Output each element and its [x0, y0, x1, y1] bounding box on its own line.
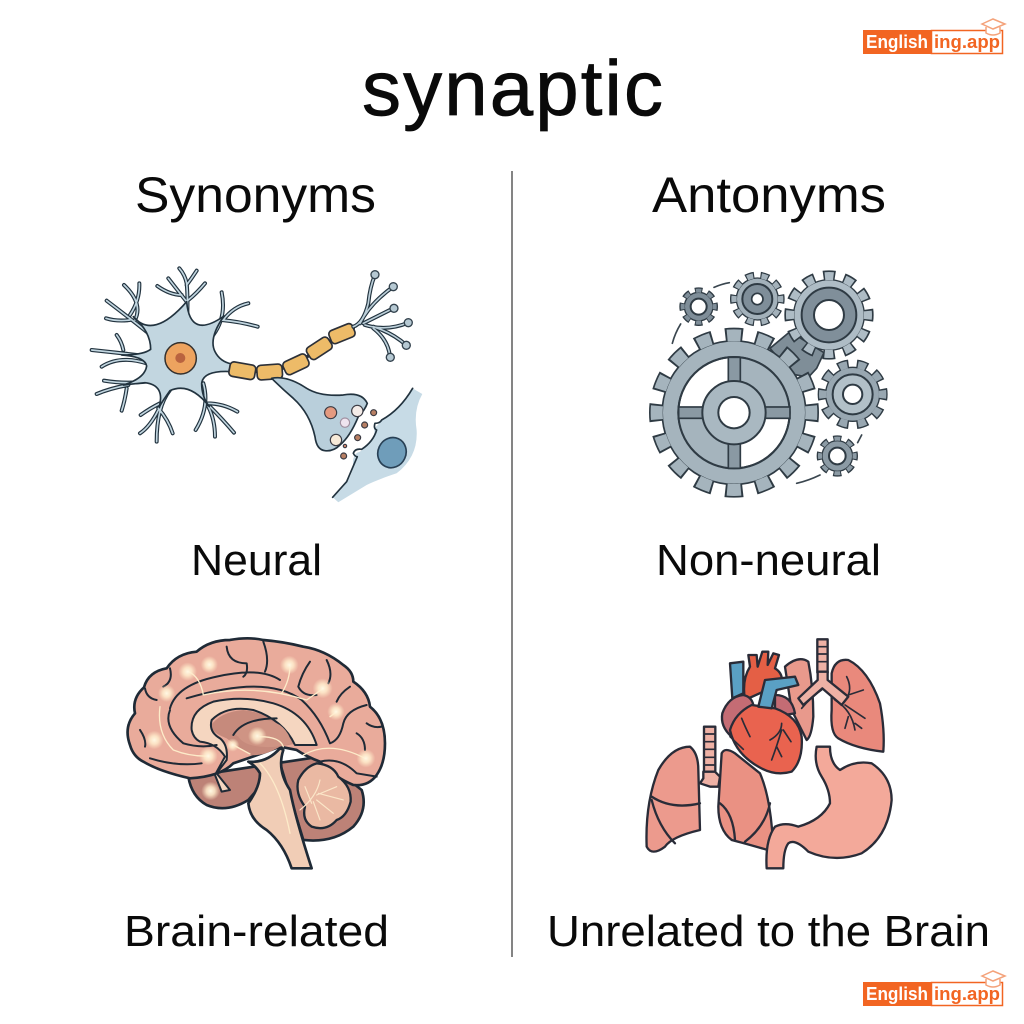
- logo top: [863, 19, 1005, 54]
- logo top: ing.app: [934, 32, 1000, 52]
- gear small top left: [683, 291, 715, 323]
- vesicles: [325, 405, 377, 459]
- myelin sheaths: [228, 322, 356, 380]
- logo top: English: [866, 32, 928, 52]
- cell body: [122, 302, 232, 407]
- label: Neural: Neural: [191, 536, 322, 585]
- inner darker core: [210, 710, 297, 755]
- gear small bottom: [820, 439, 855, 473]
- heading: antonyms: Antonyms: [652, 167, 886, 223]
- icon: organs: [646, 639, 892, 868]
- nucleus: [165, 343, 196, 374]
- synaptic bouton: [272, 378, 367, 451]
- glowing neural nodes: [145, 656, 375, 800]
- thalamus: [233, 720, 292, 747]
- logo bottom: [863, 971, 1005, 1006]
- receiving nucleus: [373, 433, 411, 472]
- label: Unrelated to the Brain: Unrelated to the Brain: [547, 907, 990, 956]
- receiving neuron: [333, 388, 422, 502]
- icon: brain: [128, 638, 385, 868]
- axon branches: [353, 275, 408, 357]
- heading: synonyms: Synonyms: [135, 167, 376, 223]
- title: synaptic: [362, 44, 663, 132]
- dashed orbit arcs: [672, 283, 862, 483]
- logo bottom: English: [866, 984, 928, 1004]
- gear connector: [770, 332, 824, 377]
- cerebellum: [297, 763, 351, 828]
- stomach: [766, 747, 892, 868]
- brain stem: [248, 748, 312, 868]
- upper lungs: [785, 639, 884, 752]
- brain lower region and cerebellum backing: [188, 757, 364, 841]
- label: Brain-related: Brain-related: [124, 907, 389, 956]
- cerebrum: [128, 638, 385, 785]
- gear top right: [790, 276, 868, 354]
- gear right: [823, 364, 883, 424]
- logo bottom: ing.app: [934, 984, 1000, 1004]
- dendrites fill: [92, 268, 258, 442]
- gyri folds: [140, 642, 382, 777]
- axon line: [230, 328, 353, 372]
- heart: [722, 652, 802, 773]
- icon: neuron: [92, 268, 422, 502]
- label: Non-neural: Non-neural: [656, 536, 881, 585]
- large gear: [656, 335, 812, 490]
- dendrites outline: [92, 268, 258, 442]
- lower lungs: [646, 727, 773, 852]
- gear top middle: [734, 276, 781, 322]
- icon: gears: [656, 276, 883, 490]
- axon terminals: [371, 271, 412, 361]
- neural pathways: [159, 665, 365, 833]
- corpus callosum: [192, 699, 317, 792]
